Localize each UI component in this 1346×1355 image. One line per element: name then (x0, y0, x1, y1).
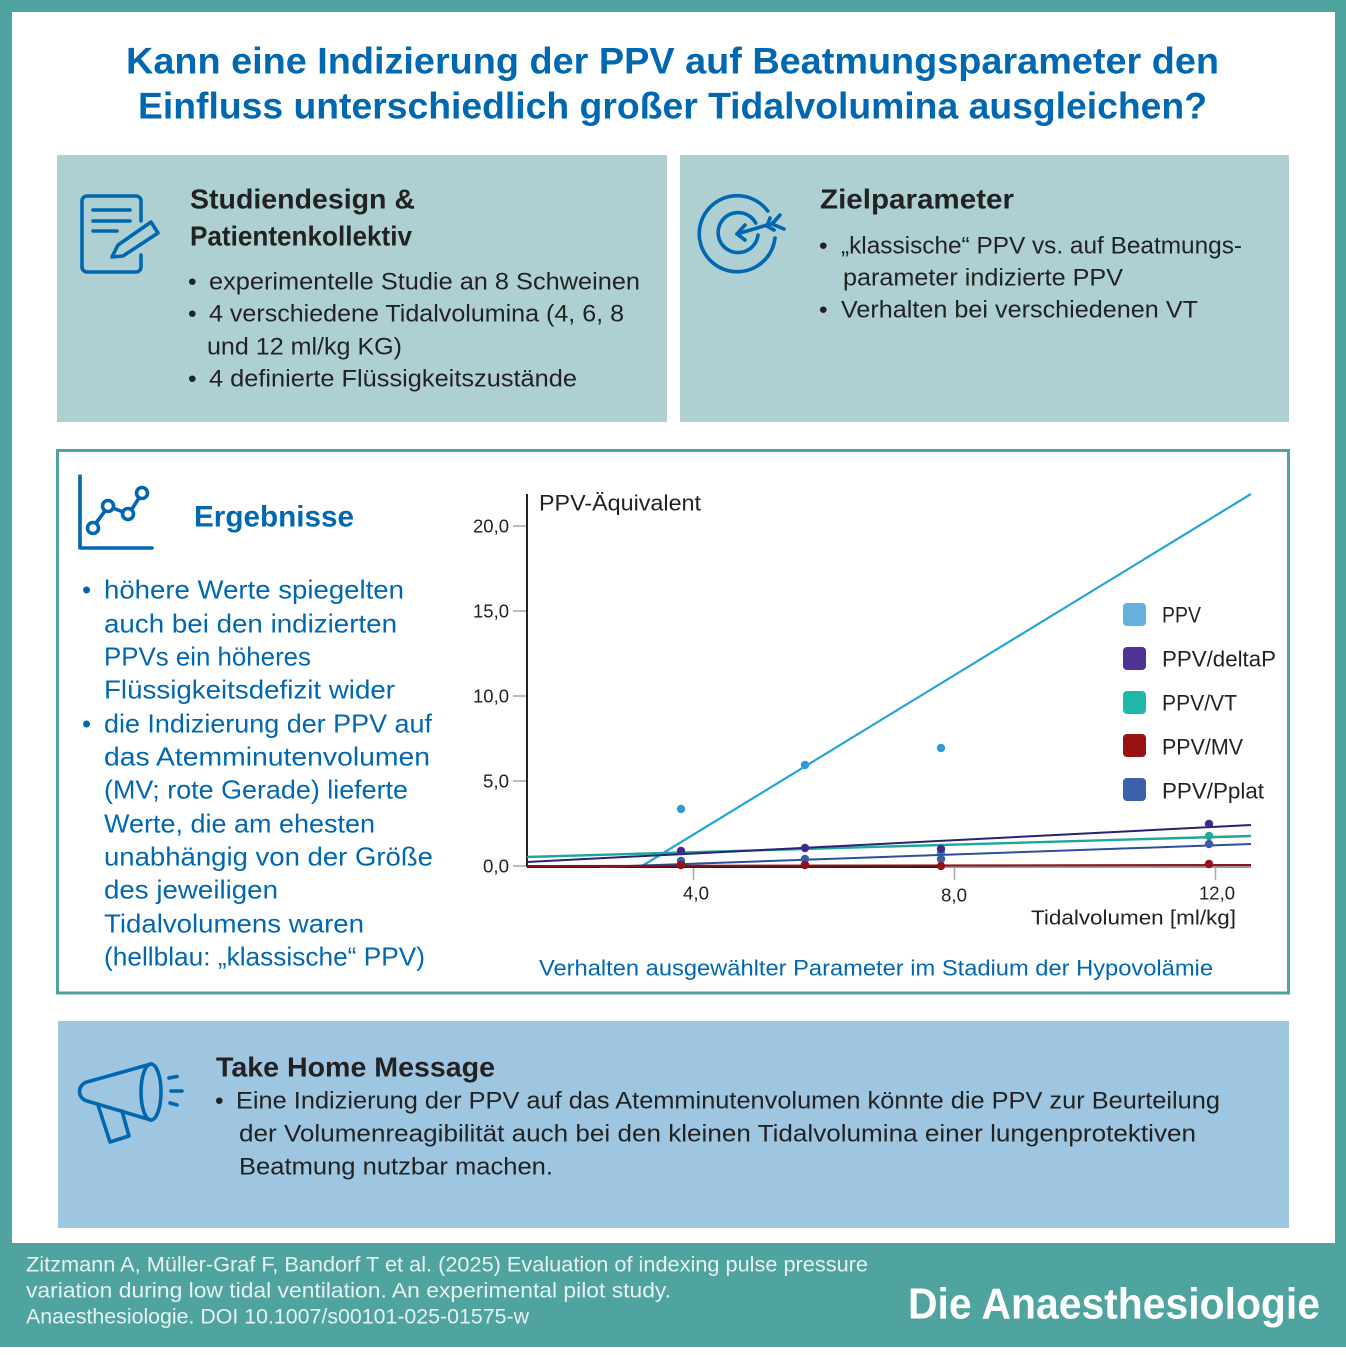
bullet list: results: Werte, die am ehesten (104, 808, 375, 838)
text: take home message: Eine Indizierung der PPV auf das Atemminutenvolumen könnte die PPV zur Beurteilung (236, 1087, 1220, 1114)
chart axes and ticks (513, 494, 1251, 880)
bullet list: target parameters: • (819, 232, 828, 259)
y axis labels: 20,0 (473, 515, 509, 536)
bullet list: study design: 4 verschiedene Tidalvolumina (4, 6, 8 (209, 300, 624, 327)
line: PPV/MV (527, 860, 1251, 870)
line: PPV (642, 494, 1251, 866)
legend (1123, 602, 1276, 803)
x axis labels: 8,0 (941, 884, 967, 905)
footer citation: Zitzmann A, Müller-Graf F, Bandorf T et al. (2025) Evaluation of indexing pulse pressure (26, 1253, 868, 1276)
panel: Zielparameter (680, 155, 1289, 422)
bullet list: study design: • (188, 268, 197, 295)
x axis labels: Tidalvolumen [ml/kg] (1031, 907, 1236, 929)
bullet list: results: unabhängig von der Größe (104, 841, 433, 871)
x axis labels (683, 882, 1236, 929)
bullet list: target parameters: parameter indizierte PPV (843, 264, 1124, 291)
icon: document with pencil (82, 196, 158, 272)
bullet list: target parameters: „klassische“ PPV vs. auf Beatmungs- (841, 232, 1242, 259)
bullet list: study design (188, 268, 640, 392)
x axis labels: 12,0 (1199, 882, 1235, 903)
bullet list: results: des jeweiligen (104, 874, 278, 904)
bullet list: results: (MV; rote Gerade) lieferte (104, 774, 408, 804)
chart: PPV equivalent versus tidal volume (473, 490, 1276, 929)
bullet list: results: höhere Werte spiegelten (104, 574, 404, 604)
bullet list: results (82, 574, 433, 971)
footer citation: Anaesthesiologie. DOI 10.1007/s00101-025-01575-w (26, 1305, 530, 1328)
footer citation (26, 1253, 868, 1328)
journal name: Die Anaesthesiologie (908, 1279, 1320, 1328)
y axis title: PPV-Äquivalent (539, 490, 702, 515)
title: Kann eine Indizierung der PPV auf Beatmungsparameter den (126, 40, 1219, 81)
panel: Studiendesign und Patientenkollektiv (57, 155, 667, 422)
line: PPV/deltaP (527, 820, 1251, 862)
bullet list: results: das Atemminutenvolumen (104, 741, 430, 771)
legend: PPV (1162, 602, 1201, 627)
text: take home message: • (215, 1087, 224, 1114)
chart caption: Verhalten ausgewählter Parameter im Stadium der Hypovolämie (539, 955, 1213, 980)
y axis labels (473, 515, 509, 876)
y axis labels: 0,0 (483, 855, 509, 876)
heading: Zielparameter: Zielparameter (820, 183, 1014, 214)
heading: Ergebnisse: Ergebnisse (194, 500, 354, 533)
footer citation: variation during low tidal ventilation. An experimental pilot study. (26, 1279, 671, 1302)
text: take home message (215, 1087, 1220, 1180)
bullet list: results: (hellblau: „klassische“ PPV) (104, 941, 425, 971)
title: Einfluss unterschiedlich großer Tidalvolumina ausgleichen? (138, 85, 1207, 126)
legend: PPV/MV (1162, 734, 1243, 759)
bullet list: results: Flüssigkeitsdefizit wider (104, 674, 395, 704)
panel: Ergebnisse (58, 450, 1288, 993)
panel: Take Home Message (58, 1021, 1289, 1228)
bullet list: study design: • (188, 300, 197, 327)
bullet list: results: • (82, 708, 91, 738)
y axis labels: 10,0 (473, 685, 509, 706)
bullet list: study design: 4 definierte Flüssigkeitszustände (209, 365, 577, 392)
bullet list: study design: experimentelle Studie an 8 Schweinen (209, 268, 640, 295)
x axis labels: 4,0 (683, 882, 709, 903)
y axis labels: 15,0 (473, 600, 509, 621)
title (126, 40, 1219, 126)
bullet list: results: Tidalvolumens waren (104, 908, 364, 938)
bullet list: study design: und 12 ml/kg KG) (207, 333, 402, 360)
line: PPV/VT (527, 832, 1251, 857)
legend: PPV/deltaP (1162, 646, 1276, 671)
bullet list: results: PPVs ein höheres (104, 641, 311, 671)
heading: Studiendesign & Patientenkollektiv: Studiendesign & (190, 183, 415, 214)
y axis labels: 5,0 (483, 770, 509, 791)
bullet list: target parameters: Verhalten bei verschiedenen VT (841, 296, 1198, 323)
icon: target with arrow (699, 196, 784, 272)
line: PPV/Pplat (600, 840, 1251, 867)
bullet list: results: auch bei den indizierten (104, 608, 397, 638)
bullet list: results: die Indizierung der PPV auf (104, 708, 433, 738)
legend: PPV/VT (1162, 690, 1237, 715)
heading: Studiendesign & Patientenkollektiv: Patientenkollektiv (190, 220, 412, 251)
bullet list: results: • (82, 574, 91, 604)
icon: megaphone (80, 1064, 182, 1142)
legend: PPV/Pplat (1162, 778, 1265, 803)
bullet list: target parameters (819, 232, 1242, 323)
heading: Take Home Message: Take Home Message (216, 1051, 495, 1082)
text: take home message: Beatmung nutzbar machen. (239, 1153, 553, 1180)
icon: line chart (80, 476, 152, 548)
bullet list: target parameters: • (819, 296, 828, 323)
heading: Studiendesign & Patientenkollektiv (190, 183, 415, 251)
text: take home message: der Volumenreagibilität auch bei den kleinen Tidalvolumina einer lungenprotektiven (239, 1120, 1196, 1147)
bullet list: study design: • (188, 365, 197, 392)
